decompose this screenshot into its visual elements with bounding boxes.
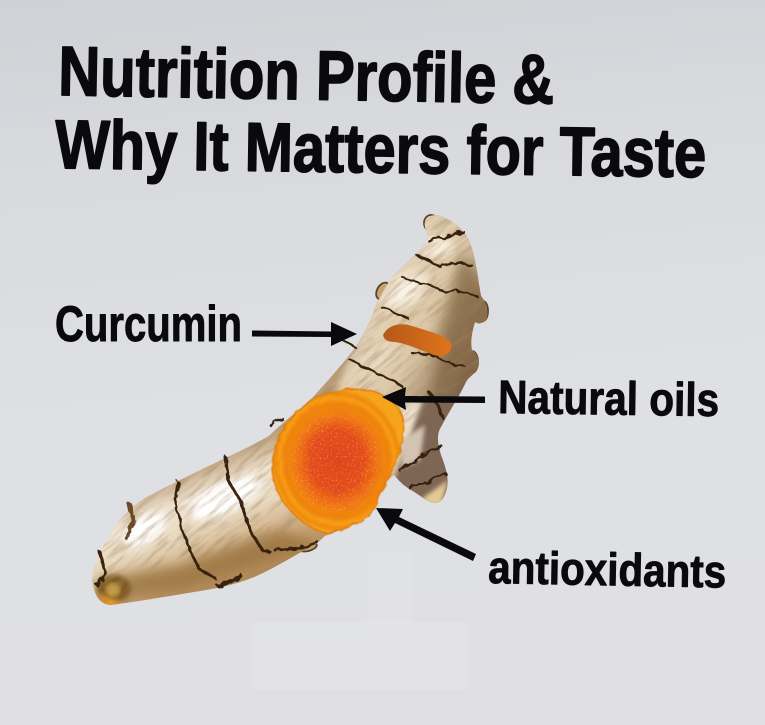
arrow: Natural oils to cut: [382, 387, 485, 410]
arrow: Curcumin to root: [252, 322, 357, 346]
arrow: antioxidants to root: [376, 508, 476, 561]
label: Natural oils: Natural oils: [498, 370, 720, 426]
rhizome nodes: [298, 215, 488, 553]
cut cross-section: [273, 389, 404, 533]
skin fissures: [97, 231, 478, 585]
rhizome body: [92, 215, 488, 605]
title: [55, 32, 707, 192]
orange scar on skin: [383, 324, 451, 356]
label: Curcumin: Curcumin: [55, 296, 242, 352]
icon: turmeric root illustration: [92, 214, 489, 605]
title: Nutrition Profile &: [58, 32, 555, 119]
label: antioxidants: antioxidants: [488, 541, 727, 598]
